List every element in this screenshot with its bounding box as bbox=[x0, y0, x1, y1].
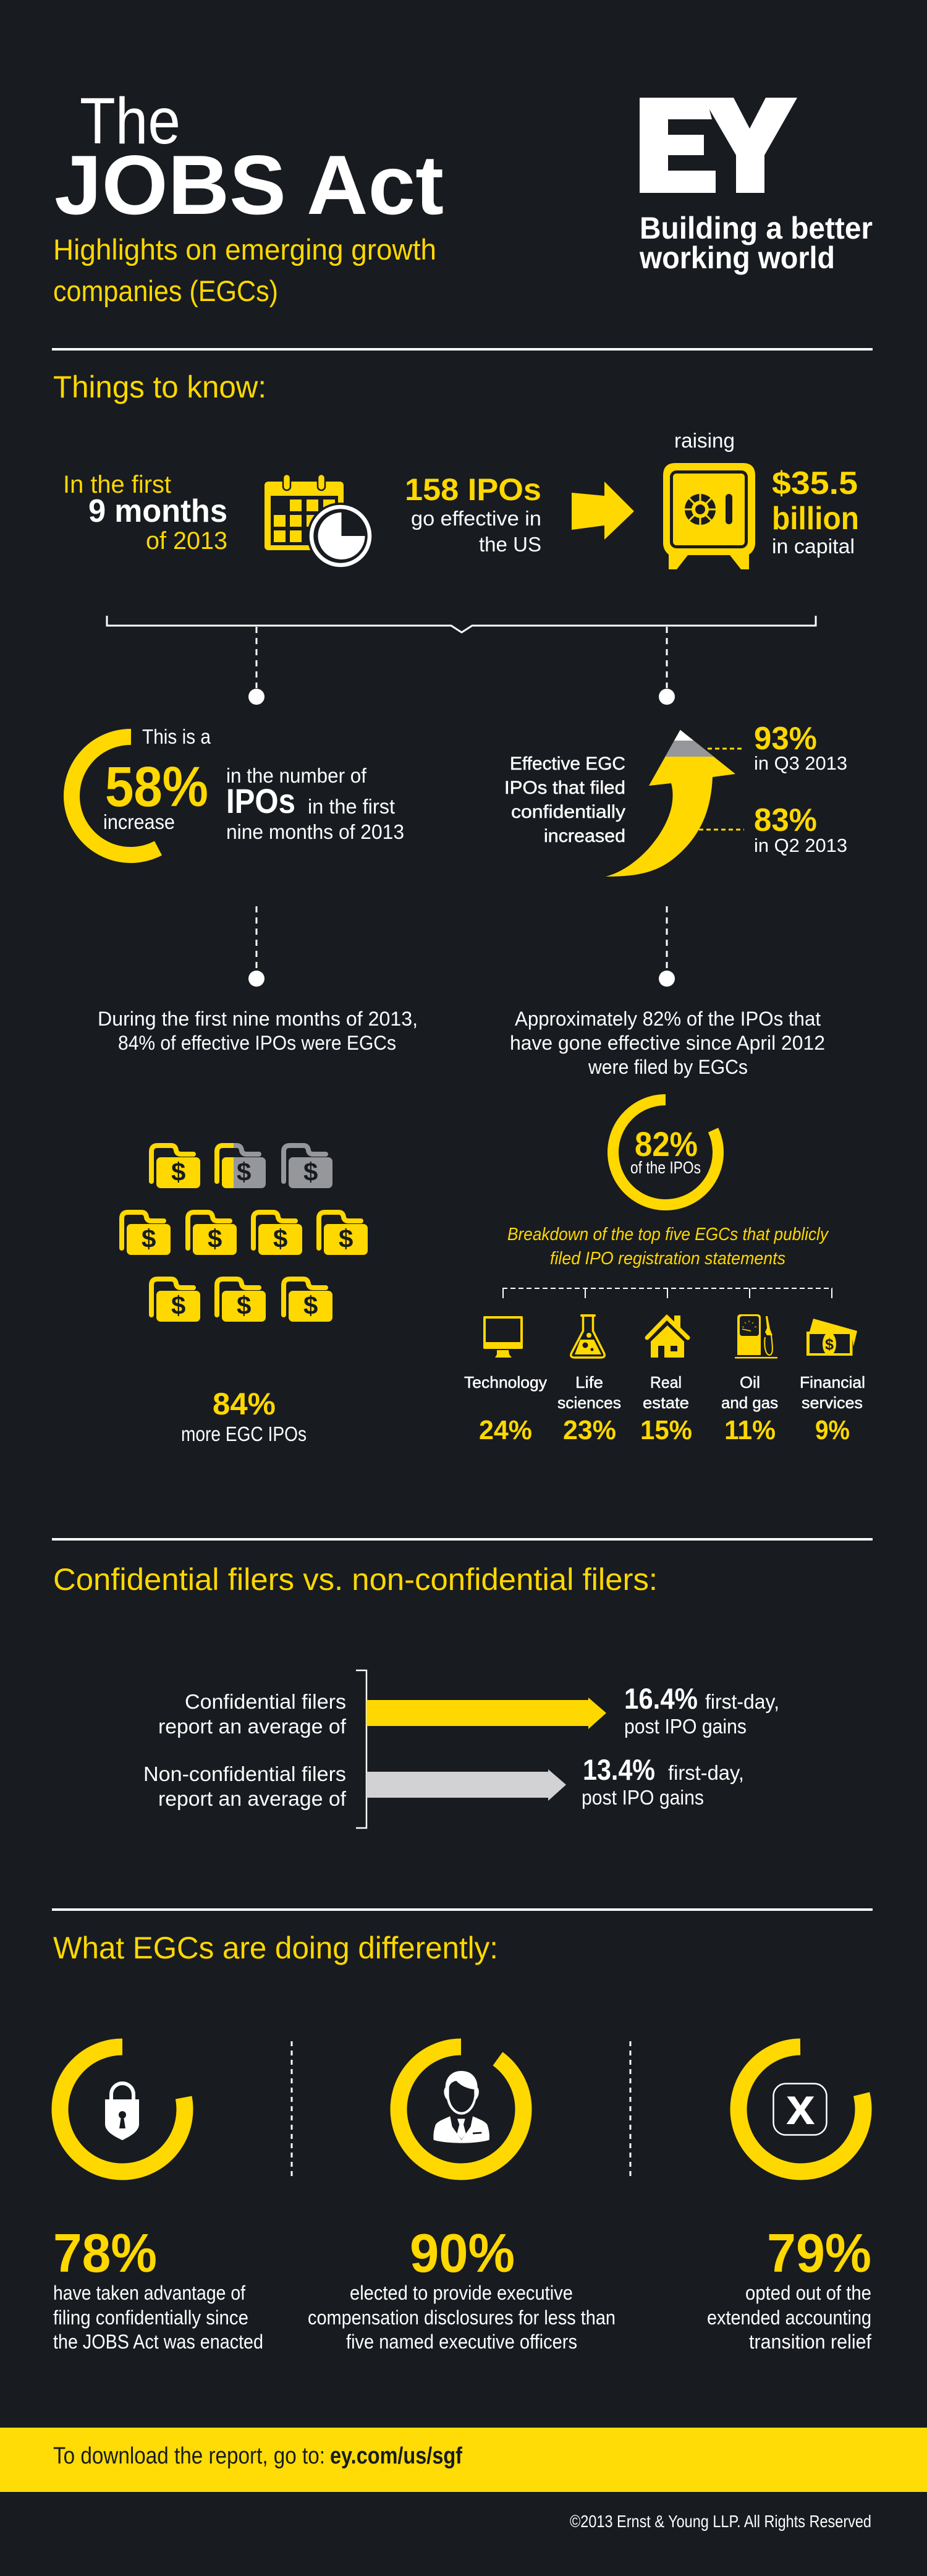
text: 78% description bbox=[53, 2282, 263, 2353]
panel: 58% increase bbox=[72, 725, 404, 855]
text block: 84% of effective IPOs bbox=[98, 1008, 418, 1054]
label: financial services 9% bbox=[800, 1373, 865, 1445]
text: first 9 months: In the first bbox=[63, 471, 171, 498]
subtitle: companies (EGCs) bbox=[53, 274, 278, 307]
label: confidential filers: report an average of bbox=[158, 1715, 347, 1738]
icon: padlock bbox=[105, 2083, 139, 2140]
text block: 84% of effective IPOs: During the first nine months of 2013, bbox=[98, 1008, 418, 1030]
EY logo: Building a better bbox=[640, 211, 873, 245]
footer band: download link: ey.com/us/sgf bbox=[330, 2443, 462, 2469]
text: 78% description: filing confidentially since bbox=[53, 2306, 248, 2329]
callout: 84% more EGC IPOs bbox=[181, 1387, 307, 1445]
text block: 82% of IPOs since April 2012: Approximately 82% of the IPOs that bbox=[515, 1008, 821, 1030]
text: 158 IPOs: the US bbox=[479, 533, 541, 556]
text: 58% callout: IPOs bbox=[226, 781, 295, 820]
value: 16.4% bbox=[624, 1682, 779, 1738]
text block: 82% of IPOs since April 2012 bbox=[510, 1008, 825, 1078]
value: 78%: 78% bbox=[53, 2222, 157, 2284]
label: real estate 15%: estate bbox=[643, 1393, 689, 1412]
text: 83% in Q2: 83% bbox=[754, 802, 817, 838]
folder 3: grey: $ bbox=[303, 1157, 318, 1186]
text: 90% description bbox=[308, 2282, 616, 2353]
arrow: grey 13.4% bbox=[366, 1769, 566, 1801]
heading: what EGCs are doing differently: What EGCs are doing differently: bbox=[53, 1931, 498, 1965]
subtitle: Highlights on emerging growth bbox=[53, 233, 436, 266]
connector: right upper bbox=[659, 627, 675, 705]
label: technology 24%: 24% bbox=[479, 1415, 532, 1445]
ring chart: 58% bbox=[72, 737, 158, 855]
text: first 9 months: 9 months bbox=[88, 493, 227, 529]
folder 2: part filled: $ bbox=[237, 1157, 251, 1186]
subheading: breakdown: Breakdown of the top five EGCs that publicly bbox=[507, 1225, 829, 1244]
value: 13.4% bbox=[582, 1753, 744, 1809]
label: oil and gas 11%: Oil bbox=[740, 1373, 760, 1392]
icon: house bbox=[647, 1316, 688, 1358]
text: first 9 months: of 2013 bbox=[146, 527, 227, 555]
icon: flask bbox=[571, 1314, 604, 1358]
label: oil and gas 11%: and gas bbox=[721, 1393, 778, 1412]
ring chart: 78% bbox=[60, 2047, 185, 2172]
label: real estate 15%: Real bbox=[650, 1373, 682, 1392]
text: capital raised bbox=[772, 465, 859, 558]
text: 90% description: elected to provide executive bbox=[350, 2282, 573, 2304]
title: JOBS Act bbox=[54, 138, 444, 232]
text block: 84% of effective IPOs: 84% of effective IPOs were EGCs bbox=[118, 1032, 396, 1054]
label: non-confidential filers bbox=[143, 1762, 347, 1810]
folder 8: $ bbox=[171, 1291, 185, 1320]
folder 1: $ bbox=[171, 1157, 185, 1186]
text: effective EGC IPOs: IPOs that filed bbox=[504, 778, 625, 798]
value: 16.4%: first-day, bbox=[705, 1690, 779, 1713]
EY logo: working world bbox=[639, 240, 835, 275]
text: effective EGC IPOs: Effective EGC bbox=[510, 754, 625, 774]
ring chart: 82% of the IPOs bbox=[613, 1100, 718, 1205]
icon: fuel pump bbox=[735, 1314, 777, 1359]
label: real estate 15%: 15% bbox=[640, 1415, 692, 1445]
text: 158 IPOs: 158 IPOs bbox=[405, 472, 541, 507]
copyright: ©2013 Ernst & Young LLP. All Rights Reserved bbox=[570, 2512, 871, 2531]
text block: 82% of IPOs since April 2012: have gone effective since April 2012 bbox=[510, 1032, 825, 1054]
folder 6: $ bbox=[273, 1224, 287, 1253]
subtitle bbox=[53, 233, 436, 307]
text: capital raised: $35.5 bbox=[772, 465, 858, 501]
text: 58% callout: 58% bbox=[105, 755, 208, 818]
text: first 9 months bbox=[63, 471, 227, 555]
panel: top five sectors bbox=[464, 1314, 865, 1445]
panel: 90% executive compensation bbox=[308, 2047, 616, 2353]
folder 1 bbox=[151, 1146, 200, 1188]
dashed bracket bbox=[502, 1288, 832, 1298]
value: 13.4%: 13.4% bbox=[583, 1753, 655, 1786]
text: capital raised: in capital bbox=[772, 535, 855, 558]
text: 93% in Q3: in Q3 2013 bbox=[754, 752, 847, 774]
icon: opt-out box bbox=[774, 2077, 827, 2135]
text: 58% callout: in the first bbox=[308, 795, 395, 818]
callout: 84% more EGC IPOs: more EGC IPOs bbox=[181, 1422, 307, 1445]
text: 58% callout: in the number of bbox=[226, 764, 367, 787]
folder 8 bbox=[151, 1279, 200, 1322]
connector: left lower bbox=[248, 906, 265, 987]
text: 58% callout: This is a bbox=[142, 725, 211, 748]
icon: executive bbox=[433, 2071, 489, 2143]
text: 78% description: have taken advantage of bbox=[53, 2282, 245, 2304]
label: technology 24% bbox=[464, 1373, 547, 1445]
value: 16.4%: post IPO gains bbox=[624, 1715, 747, 1738]
arrow: curved upward bbox=[606, 730, 735, 877]
text: 79% description: extended accounting bbox=[707, 2306, 871, 2329]
text: raising: raising bbox=[674, 429, 735, 452]
text: capital raised: billion bbox=[772, 501, 859, 537]
text: 93% in Q3 bbox=[754, 721, 847, 774]
callout: 84% more EGC IPOs: 84% bbox=[213, 1387, 276, 1421]
panel: 79% opted out bbox=[707, 2047, 871, 2353]
EY logo bbox=[639, 98, 873, 275]
text: 78% description: the JOBS Act was enacted bbox=[53, 2331, 263, 2353]
text: 90% description: compensation disclosures for less than bbox=[308, 2306, 616, 2329]
arrow: to capital bbox=[572, 482, 634, 540]
icon: calendar and clock bbox=[265, 474, 374, 569]
ring chart: 82% of the IPOs: 82% bbox=[635, 1124, 698, 1163]
label: confidential filers bbox=[158, 1690, 347, 1738]
ring chart: 79% bbox=[739, 2047, 863, 2172]
connector: right lower bbox=[659, 906, 675, 987]
label: financial services 9%: services bbox=[802, 1393, 863, 1412]
text: 58% callout: increase bbox=[103, 810, 175, 833]
text: 158 IPOs bbox=[405, 472, 541, 556]
label: life sciences 23%: Life bbox=[575, 1373, 603, 1392]
text: 158 IPOs: go effective in bbox=[411, 507, 541, 530]
folder 3: grey bbox=[284, 1146, 332, 1188]
label: life sciences 23% bbox=[557, 1373, 621, 1445]
text: 83% in Q2 bbox=[754, 802, 847, 856]
value: 16.4%: 16.4% bbox=[624, 1682, 698, 1715]
text: 58% callout: nine months of 2013 bbox=[226, 820, 404, 843]
text: 93% in Q3: 93% bbox=[754, 721, 817, 757]
bracket bbox=[356, 1670, 366, 1828]
panel: 78% confidential filing bbox=[53, 2047, 263, 2353]
folder 7: $ bbox=[339, 1224, 353, 1253]
value: 79%: 79% bbox=[767, 2222, 871, 2284]
icon: money bbox=[806, 1319, 857, 1356]
footer band: download link: To download the report, go to: bbox=[53, 2443, 325, 2469]
folder 6 bbox=[253, 1212, 302, 1255]
icon: monitor bbox=[483, 1316, 523, 1358]
folder 5 bbox=[188, 1212, 237, 1255]
title: The bbox=[80, 85, 180, 158]
ring chart: 90% bbox=[399, 2047, 523, 2172]
value: 13.4%: first-day, bbox=[668, 1761, 744, 1784]
label: technology 24%: Technology bbox=[464, 1373, 547, 1392]
text: 79% description: transition relief bbox=[749, 2331, 871, 2353]
folder 7 bbox=[319, 1212, 368, 1255]
text: 90% description: five named executive officers bbox=[346, 2331, 577, 2353]
footer band: download link bbox=[0, 2428, 927, 2492]
text: 83% in Q2: in Q2 2013 bbox=[754, 835, 847, 856]
folder 4 bbox=[122, 1212, 171, 1255]
label: non-confidential filers: report an average of bbox=[158, 1787, 347, 1810]
text: 58% callout bbox=[103, 725, 404, 843]
value: 90%: 90% bbox=[410, 2222, 515, 2284]
title bbox=[54, 85, 444, 232]
folder 2: part filled bbox=[217, 1146, 266, 1188]
icon: money: $ bbox=[825, 1336, 834, 1353]
value: 13.4%: post IPO gains bbox=[582, 1786, 704, 1809]
label: oil and gas 11%: 11% bbox=[724, 1415, 776, 1445]
icon: opt-out box: x bbox=[786, 2077, 815, 2135]
label: life sciences 23%: 23% bbox=[563, 1415, 616, 1445]
icon: safe bbox=[663, 463, 755, 569]
subheading: breakdown bbox=[507, 1225, 829, 1269]
label: non-confidential filers: Non-confidential filers bbox=[143, 1762, 346, 1785]
panel: gains comparison bbox=[143, 1670, 779, 1828]
label: confidential filers: Confidential filers bbox=[185, 1690, 346, 1713]
text: 79% description: opted out of the bbox=[745, 2282, 871, 2304]
text block: 82% of IPOs since April 2012: were filed by EGCs bbox=[588, 1056, 748, 1078]
text: 79% description bbox=[707, 2282, 871, 2353]
text: effective EGC IPOs bbox=[504, 754, 625, 846]
folder 4: $ bbox=[142, 1224, 156, 1253]
bracket connector bbox=[107, 616, 816, 632]
panel: confidential filings increase bbox=[504, 721, 847, 877]
connector: left upper bbox=[248, 627, 265, 705]
label: financial services 9%: 9% bbox=[815, 1415, 850, 1445]
heading: things to know: Things to know: bbox=[53, 370, 266, 404]
subheading: breakdown: filed IPO registration statements bbox=[550, 1249, 785, 1269]
ring chart: 82% of the IPOs: of the IPOs bbox=[630, 1158, 701, 1177]
folder 5: $ bbox=[208, 1224, 222, 1253]
label: life sciences 23%: sciences bbox=[557, 1393, 621, 1412]
folder 9: $ bbox=[237, 1291, 251, 1320]
pictogram: folders 84% bbox=[122, 1146, 368, 1322]
folder 9 bbox=[217, 1279, 266, 1322]
label: financial services 9%: Financial bbox=[800, 1373, 865, 1392]
text: effective EGC IPOs: increased bbox=[544, 826, 625, 846]
arrow: yellow 16.4% bbox=[366, 1698, 606, 1729]
folder 10 bbox=[284, 1279, 332, 1322]
text: effective EGC IPOs: confidentially bbox=[511, 802, 625, 822]
label: real estate 15% bbox=[640, 1373, 692, 1445]
label: oil and gas 11% bbox=[721, 1373, 778, 1445]
folder 10: $ bbox=[303, 1291, 318, 1320]
heading: confidential vs non-confidential: Confidential filers vs. non-confidential filers: bbox=[53, 1562, 658, 1597]
panel: IPO summary row bbox=[63, 429, 859, 569]
